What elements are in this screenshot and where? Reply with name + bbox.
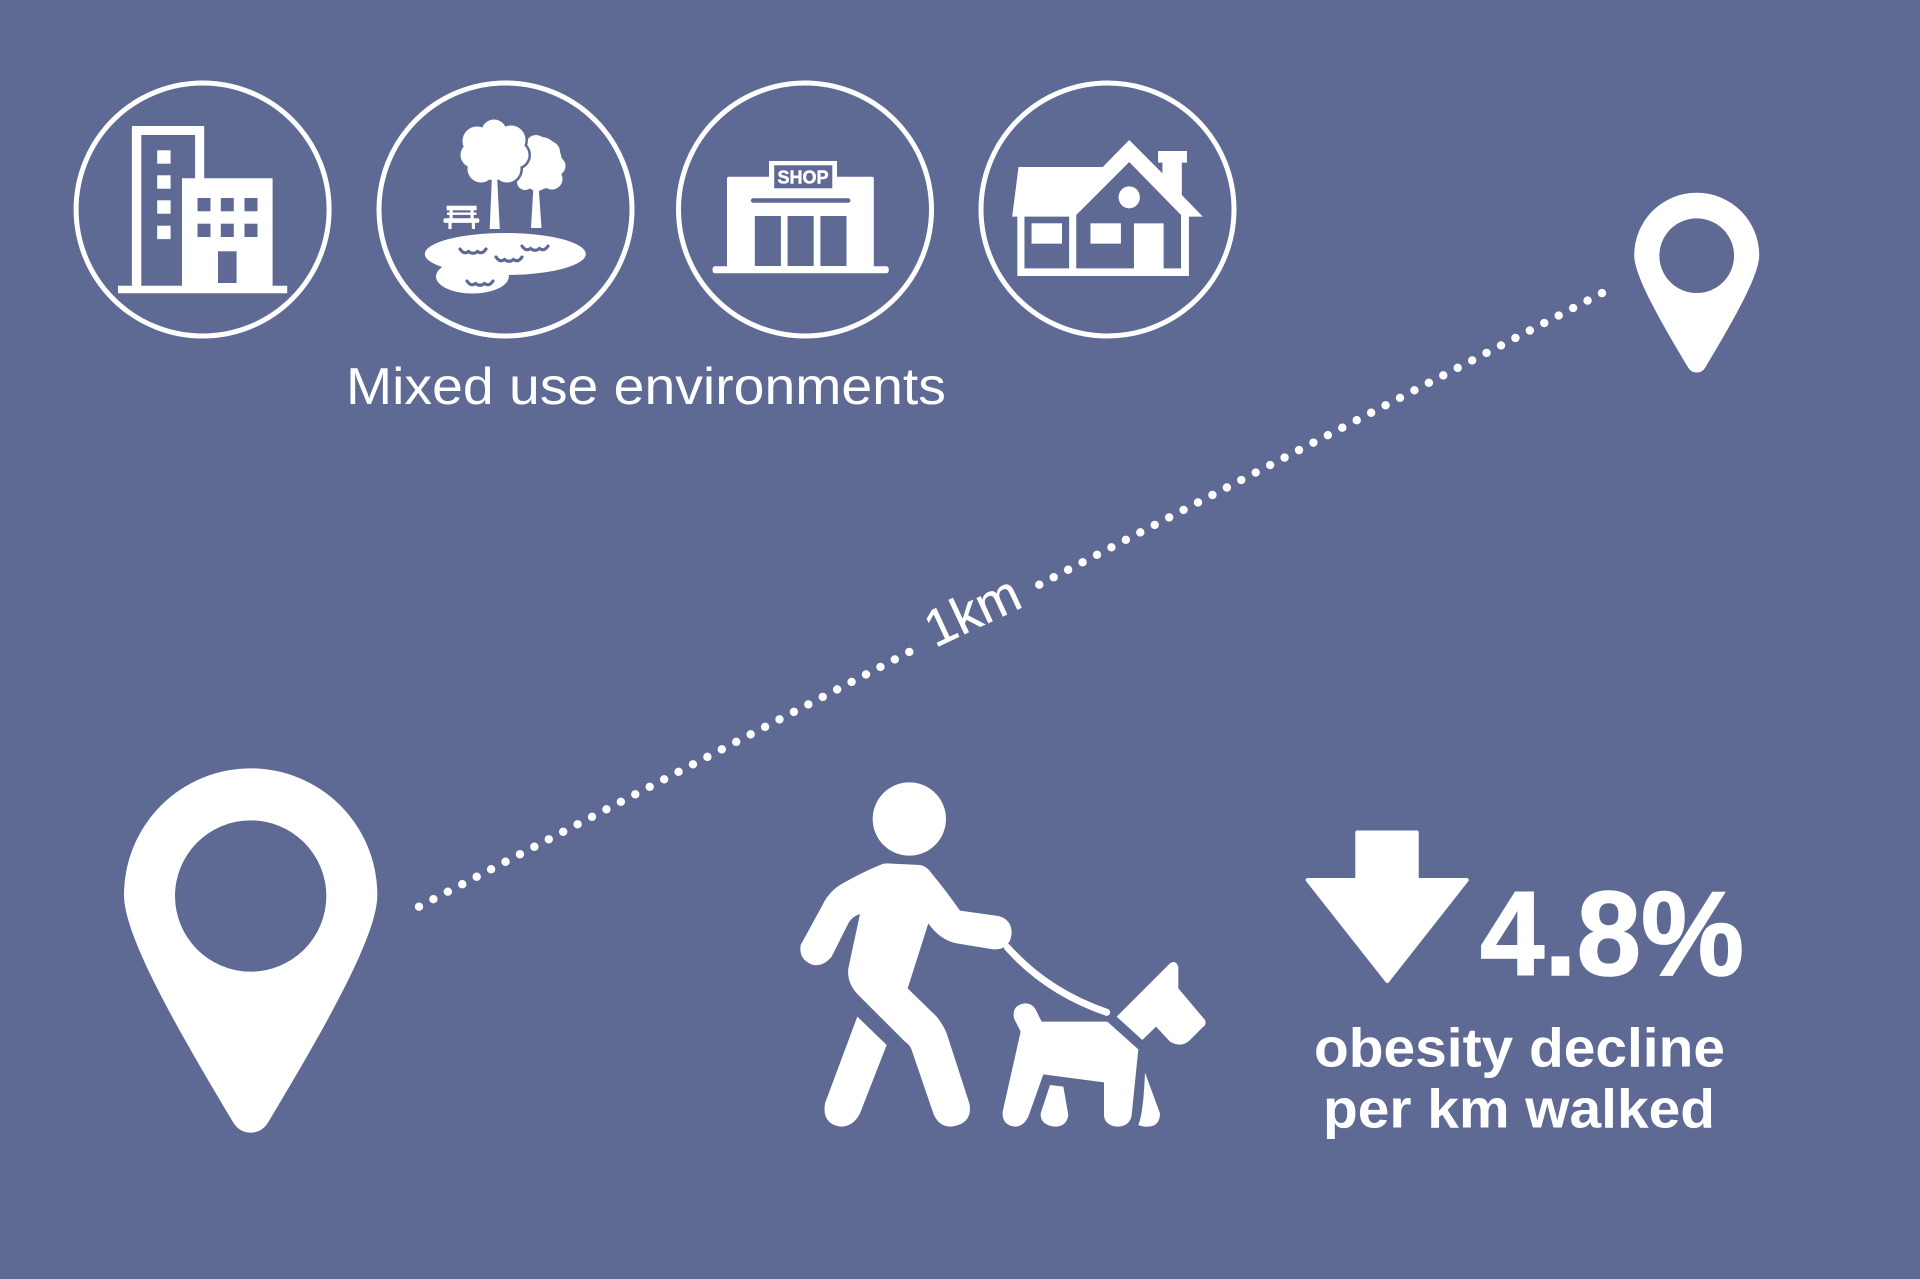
statistic: obesity decline — [1308, 832, 1744, 1140]
caption: obesity decline per km walked: per km walked — [1323, 1078, 1715, 1140]
icon: shop — [678, 83, 932, 336]
icon: person walking a dog — [800, 782, 1206, 1127]
figure: 4.8%: 4.8% — [1480, 867, 1744, 1001]
icon: office buildings — [76, 83, 329, 336]
dotted route line — [419, 293, 1603, 907]
caption: obesity decline per km walked: obesity decline — [1314, 1017, 1725, 1079]
dog — [1003, 962, 1206, 1127]
distance label: 1km: 1km — [916, 564, 1030, 659]
icon: park with trees, bench and pond — [379, 83, 632, 336]
icon: down arrow — [1308, 832, 1467, 981]
map pin: origin — [124, 768, 377, 1133]
panel: mixed use icons — [76, 83, 1234, 336]
leash — [1007, 947, 1107, 1012]
shop sign text: SHOP — [778, 166, 828, 188]
person — [800, 782, 1012, 1127]
heading: mixed use environments: Mixed use environments — [346, 358, 946, 416]
map pin: destination — [1634, 193, 1759, 373]
icon: house — [981, 83, 1234, 336]
caption: obesity decline per km walked — [1314, 1017, 1725, 1140]
